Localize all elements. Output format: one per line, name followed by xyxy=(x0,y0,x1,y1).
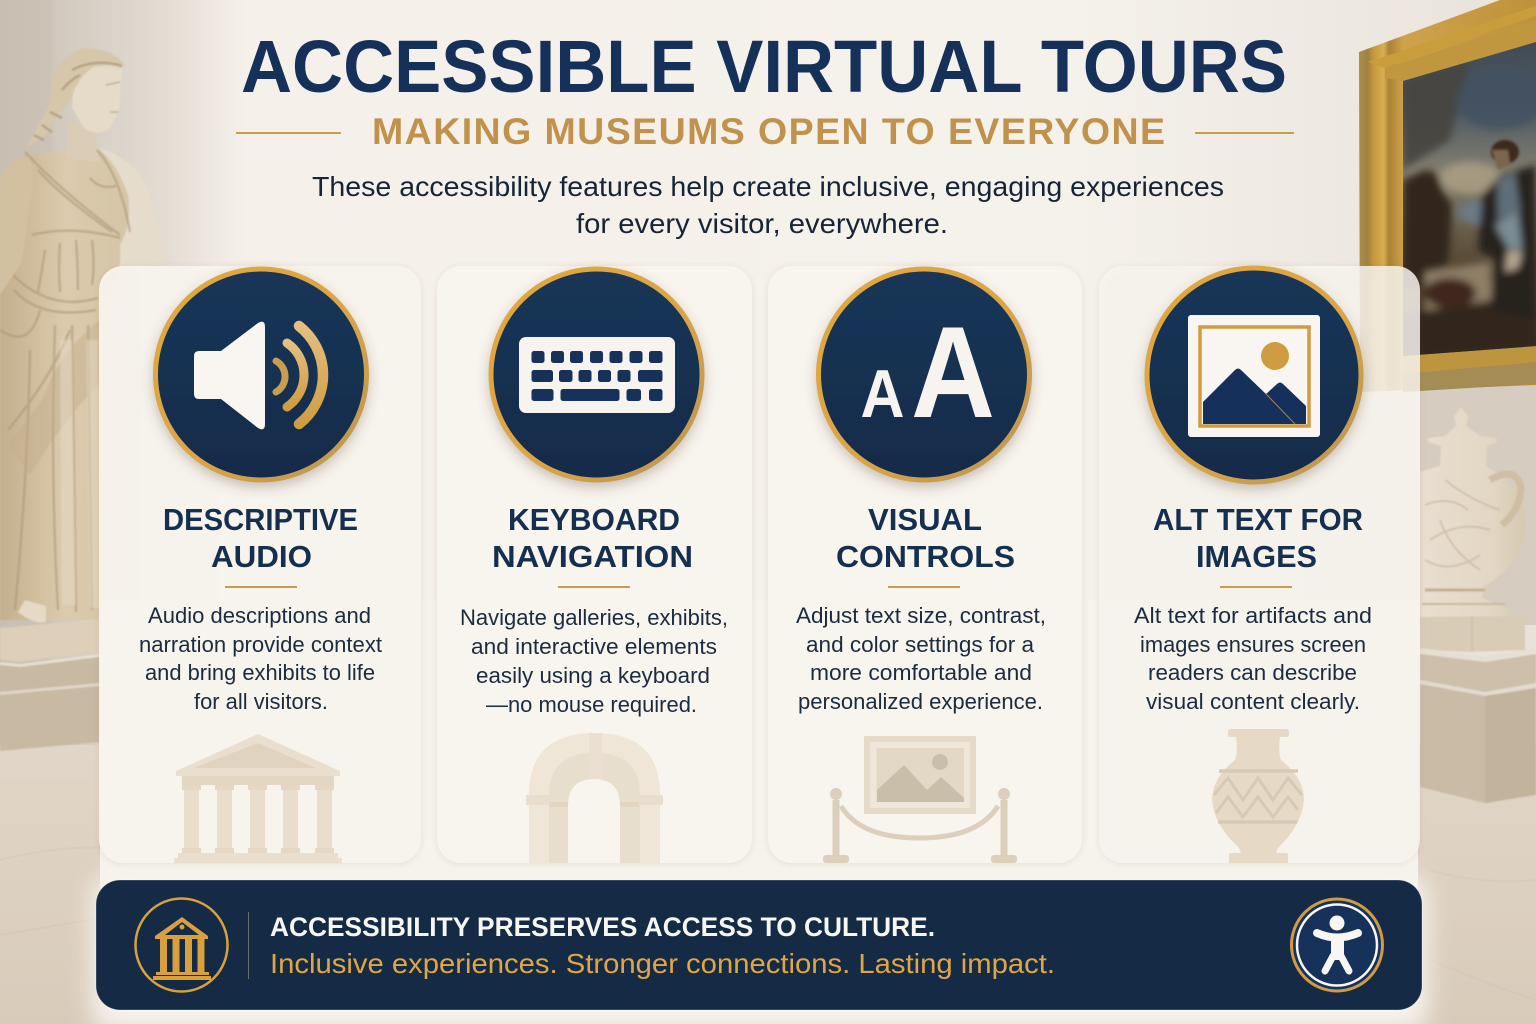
intro text xyxy=(312,171,1224,239)
description: Audio descriptions and xyxy=(148,603,371,628)
statue xyxy=(0,48,168,623)
description: narration provide context xyxy=(139,632,382,657)
description: readers can describe xyxy=(1148,660,1357,685)
painting xyxy=(1359,0,1536,392)
heading: ALT TEXT FOR xyxy=(1153,502,1363,537)
panel: visual controls xyxy=(768,266,1082,863)
heading xyxy=(836,502,1015,574)
icon: text size xyxy=(818,269,1030,480)
banner text: Inclusive experiences. Stronger connections. Lasting impact. xyxy=(270,948,1055,979)
description: Alt text for artifacts and xyxy=(1134,603,1372,628)
description: easily using a keyboard xyxy=(476,663,710,688)
subtitle with rules: MAKING MUSEUMS OPEN TO EVERYONE xyxy=(372,110,1165,152)
heading: CONTROLS xyxy=(836,539,1015,574)
heading xyxy=(1153,502,1363,574)
description: Navigate galleries, exhibits, xyxy=(460,605,728,630)
description xyxy=(1134,603,1372,714)
panel: alt text for images xyxy=(1099,266,1420,863)
heading: AUDIO xyxy=(211,539,312,574)
icon: text size: A xyxy=(911,299,995,445)
heading xyxy=(163,502,358,574)
icon: museum xyxy=(136,898,228,992)
title: ACCESSIBLE VIRTUAL TOURS xyxy=(241,25,1287,108)
description: and color settings for a xyxy=(806,632,1035,657)
panel: keyboard navigation xyxy=(437,266,752,863)
banner text: ACCESSIBILITY PRESERVES ACCESS TO CULTURE. xyxy=(270,912,935,942)
description: and bring exhibits to life xyxy=(145,660,375,685)
description: and interactive elements xyxy=(471,634,717,659)
heading: NAVIGATION xyxy=(492,539,693,574)
description xyxy=(796,603,1046,714)
description: personalized experience. xyxy=(798,689,1043,714)
heading: VISUAL xyxy=(868,502,982,537)
description xyxy=(139,603,382,714)
soft glow around banner xyxy=(92,876,1428,1024)
heading: KEYBOARD xyxy=(508,502,680,537)
icon: temple xyxy=(174,734,342,863)
heading: IMAGES xyxy=(1196,539,1317,574)
description: visual content clearly. xyxy=(1146,689,1360,714)
description: for all visitors. xyxy=(194,689,328,714)
heading: DESCRIPTIVE xyxy=(163,502,358,537)
panel: descriptive audio xyxy=(99,266,421,863)
description: —no mouse required. xyxy=(486,692,697,717)
urn on pedestal xyxy=(1420,407,1536,803)
icon: vase xyxy=(1212,729,1304,863)
bottom banner xyxy=(96,880,1422,1010)
icon: text size: A xyxy=(860,356,904,432)
description: images ensures screen xyxy=(1140,632,1366,657)
intro text: These accessibility features help create inclusive, engaging experiences xyxy=(312,171,1224,202)
icon: image xyxy=(1147,268,1361,482)
icon: framed picture with rope xyxy=(823,736,1017,863)
heading xyxy=(492,502,693,574)
banner text xyxy=(270,912,1055,979)
icon: accessibility figure xyxy=(1292,899,1382,991)
light area behind panels xyxy=(100,600,1418,890)
description xyxy=(460,605,728,717)
description: more comfortable and xyxy=(810,660,1032,685)
icon: keyboard xyxy=(491,269,702,480)
floor xyxy=(0,745,1536,1024)
statue pedestal xyxy=(0,619,100,751)
description: Adjust text size, contrast, xyxy=(796,603,1046,628)
icon: speaker xyxy=(156,269,366,480)
icon: arch xyxy=(526,733,663,863)
intro text: for every visitor, everywhere. xyxy=(576,208,948,239)
